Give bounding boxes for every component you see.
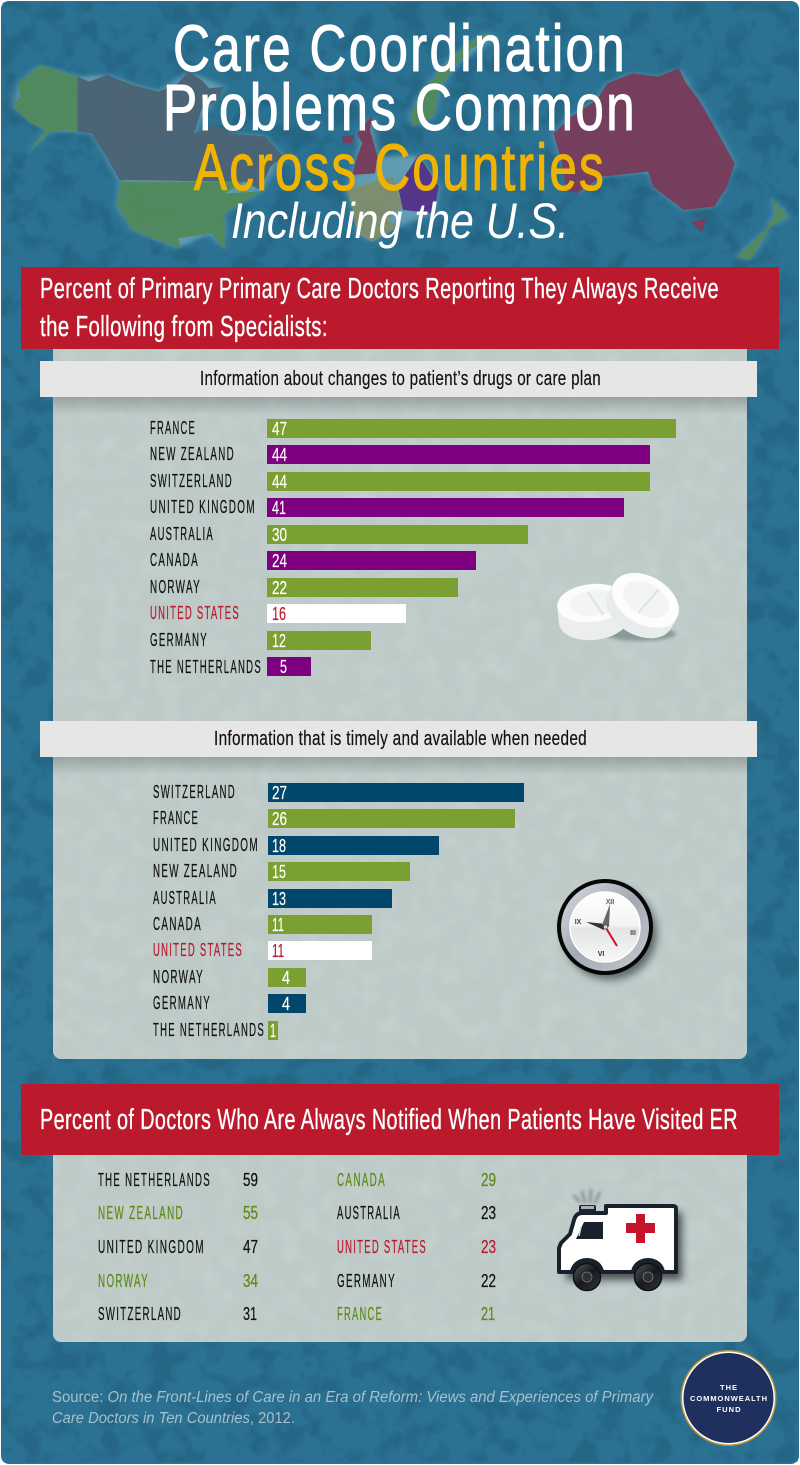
bar chart: timely information: CANADA [153, 913, 202, 934]
title: Problems Common [163, 70, 637, 144]
icon: clock: IX [575, 919, 582, 926]
bar chart: changes to drugs or care plan: 16 [272, 603, 286, 624]
title: Including the U.S. [231, 193, 569, 249]
table: ER notification, left column: THE NETHERLANDS [98, 1169, 211, 1190]
panel: ER notification [53, 1155, 747, 1342]
bar chart: changes to drugs or care plan: NEW ZEALAND [150, 443, 235, 464]
bar chart: changes to drugs or care plan: 24 [272, 550, 287, 571]
heading: specialists: the Following from Specialists: [40, 311, 328, 343]
map: Norway [411, 33, 497, 127]
table: ER notification, left column: 55 [243, 1202, 258, 1223]
bar chart: timely information: UNITED KINGDOM [153, 834, 259, 855]
bar chart: changes to drugs or care plan: CANADA [150, 549, 199, 570]
title [163, 11, 637, 249]
bar chart: changes to drugs or care plan: 47 [272, 418, 287, 439]
title: Across Countries [194, 130, 606, 204]
bar chart: changes to drugs or care plan: AUSTRALIA [150, 523, 214, 544]
bar chart: timely information: 11 [272, 940, 284, 961]
logo: The Commonwealth Fund: THE [720, 1383, 737, 1392]
subheading: drugs or care plan: Information about changes to patient’s drugs or care plan [200, 367, 601, 390]
map: Alaska [13, 65, 78, 155]
bar chart: changes to drugs or care plan: UNITED STATES [150, 602, 240, 623]
bar chart: timely information: NORWAY [153, 966, 204, 987]
panel: bar charts [53, 349, 747, 1059]
bar chart: changes to drugs or care plan: 5 [280, 656, 287, 677]
heading: specialists [21, 267, 779, 349]
bar chart: timely information: 18 [272, 835, 286, 856]
table: ER notification, left column: NORWAY [98, 1270, 149, 1291]
table: ER notification, right column: GERMANY [337, 1270, 396, 1291]
world map of ten countries [13, 33, 788, 260]
heading: ER notification [21, 1084, 779, 1155]
bar chart: changes to drugs or care plan: 44 [272, 444, 287, 465]
table: ER notification, left column: 59 [243, 1169, 258, 1190]
map: New Zealand [737, 197, 788, 260]
bar chart: changes to drugs or care plan: 44 [272, 471, 287, 492]
logo: The Commonwealth Fund: FUND [716, 1405, 741, 1414]
bar chart: changes to drugs or care plan: GERMANY [150, 629, 208, 650]
bar chart: changes to drugs or care plan [150, 417, 676, 677]
table: ER notification, right column: FRANCE [337, 1303, 383, 1324]
map: Canada [78, 72, 283, 190]
table: ER notification, right column: 23 [481, 1202, 496, 1223]
table: ER notification, left column: UNITED KINGDOM [98, 1236, 205, 1257]
bar chart: changes to drugs or care plan: 22 [272, 577, 287, 598]
subheading: drugs or care plan [40, 361, 757, 397]
icon: clock: III [630, 930, 636, 937]
bar chart: timely information [153, 781, 524, 1041]
table: ER notification, right column: 23 [481, 1236, 496, 1257]
source note [52, 1389, 654, 1427]
bar chart: changes to drugs or care plan: THE NETHERLANDS [150, 656, 262, 677]
table: ER notification, right column: 29 [481, 1169, 496, 1190]
table: ER notification, left column: 34 [243, 1270, 258, 1291]
map: Germany [398, 155, 439, 213]
source note: Source: On the Front-Lines of Care in an Era of Reform: Views and Experiences of Primary [52, 1389, 654, 1406]
bar chart: changes to drugs or care plan: 12 [272, 630, 286, 651]
table: ER notification, right column [337, 1169, 496, 1324]
table: ER notification, right column: 21 [481, 1303, 495, 1324]
bar chart: timely information: THE NETHERLANDS [153, 1019, 265, 1040]
source note: Care Doctors in Ten Countries, 2012. [52, 1410, 295, 1427]
bar chart: changes to drugs or care plan: NORWAY [150, 576, 201, 597]
title: Care Coordination [173, 11, 627, 85]
bar chart: timely information: SWITZERLAND [153, 781, 236, 802]
icon: clock: VI [598, 951, 604, 958]
bar chart: changes to drugs or care plan: UNITED KINGDOM [150, 496, 256, 517]
table: ER notification, left column: 47 [243, 1236, 258, 1257]
bar chart: changes to drugs or care plan: FRANCE [150, 417, 196, 438]
bar chart: timely information: 1 [270, 1020, 276, 1041]
subheading: timely information [40, 721, 757, 757]
map: Australia [554, 68, 735, 233]
map: United Kingdom and Ireland [342, 115, 378, 175]
bar chart: timely information: FRANCE [153, 807, 199, 828]
table: ER notification, right column: 22 [481, 1270, 496, 1291]
subheading: timely information: Information that is timely and available when needed [214, 727, 587, 750]
bar chart: changes to drugs or care plan: SWITZERLAND [150, 470, 233, 491]
map: France [347, 177, 403, 242]
icon: clock: XII [606, 899, 614, 906]
table: ER notification, right column: CANADA [337, 1169, 386, 1190]
logo: The Commonwealth Fund: COMMONWEALTH [690, 1394, 767, 1403]
icon: ambulance [559, 1189, 682, 1290]
bar chart: timely information: 13 [272, 888, 286, 909]
table: ER notification, right column: AUSTRALIA [337, 1202, 401, 1223]
icon: pills [555, 562, 689, 650]
table: ER notification, right column: UNITED STATES [337, 1236, 427, 1257]
bar chart: timely information: UNITED STATES [153, 939, 243, 960]
icon: clock [557, 879, 657, 980]
bar chart: timely information: 15 [272, 861, 286, 882]
table: ER notification, left column: NEW ZEALAND [98, 1202, 184, 1223]
table: ER notification, left column: SWITZERLAND [98, 1303, 182, 1324]
bar chart: timely information: 4 [282, 967, 290, 988]
bar chart: timely information: NEW ZEALAND [153, 860, 238, 881]
bar chart: changes to drugs or care plan: 30 [272, 524, 287, 545]
bar chart: timely information: 27 [272, 782, 287, 803]
logo: The Commonwealth Fund [680, 1350, 776, 1446]
bar chart: timely information: 11 [272, 914, 284, 935]
bar chart: timely information: AUSTRALIA [153, 887, 217, 908]
bar chart: changes to drugs or care plan: 41 [272, 497, 286, 518]
bar chart: timely information: GERMANY [153, 992, 211, 1013]
bar chart: timely information: 26 [272, 808, 287, 829]
bar chart: timely information: 4 [282, 993, 290, 1014]
table: ER notification, left column: 31 [243, 1303, 257, 1324]
table: ER notification, left column [98, 1169, 258, 1324]
map: United States [117, 182, 260, 250]
